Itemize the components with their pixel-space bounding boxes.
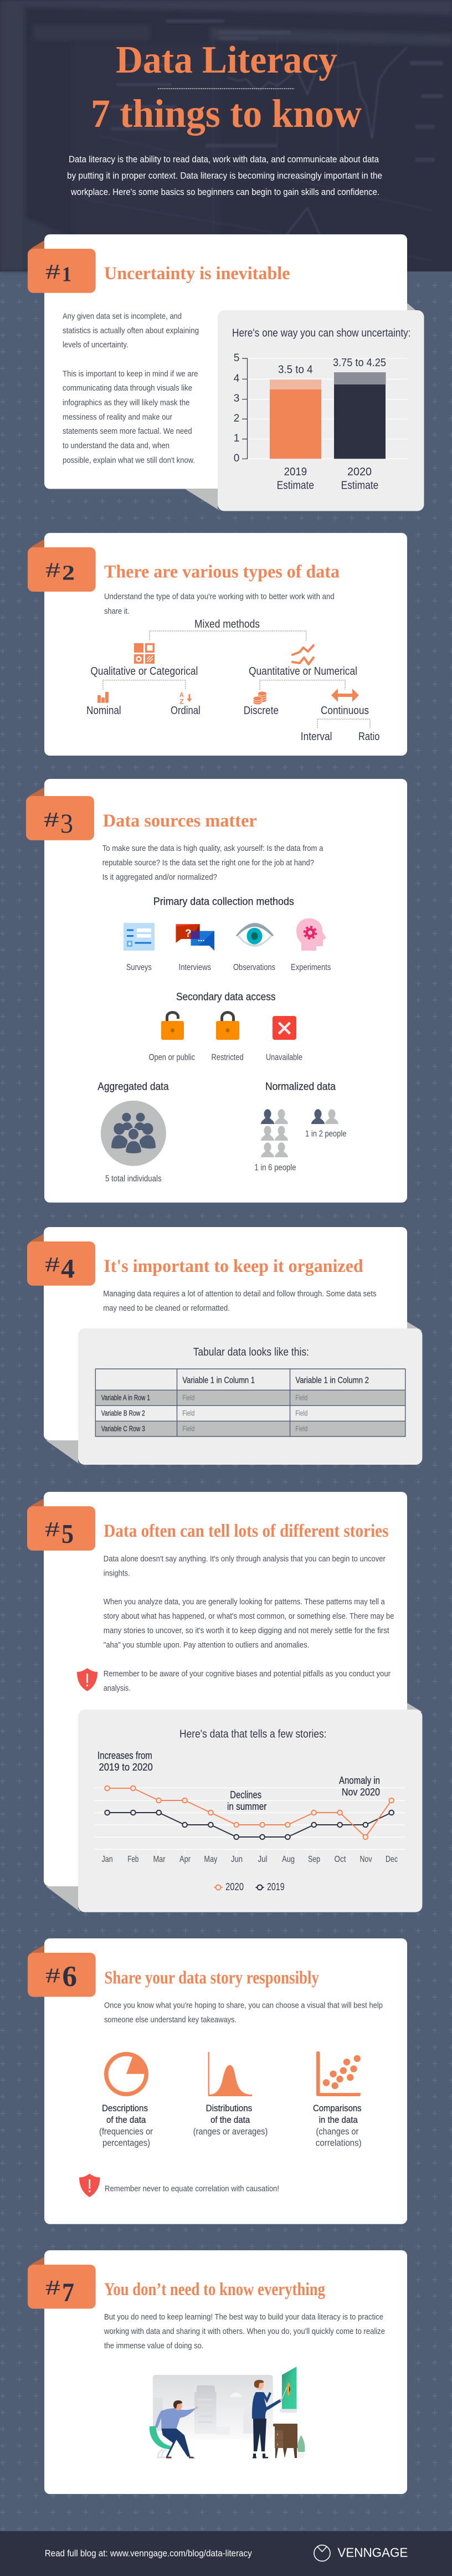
- icon: experiments head: [296, 918, 326, 951]
- table: Variable B Row 2: [101, 1409, 145, 1418]
- table: Field: [295, 1425, 307, 1433]
- labels: descriptions: of the data: [106, 2115, 146, 2125]
- callout: correlation warning: Remember never to equate correlation with causation!: [105, 2184, 279, 2193]
- table: Variable C Row 3: [101, 1425, 145, 1433]
- month axis labels: Jul: [258, 1855, 267, 1864]
- text: stories body: story about what has happened, or what's most common, or something else. There may be: [104, 1612, 394, 1621]
- text: uncertainty body: to understand the data and, when: [63, 441, 170, 450]
- heading 1: Uncertainty is inevitable: [104, 264, 290, 284]
- table: Field: [182, 1394, 194, 1402]
- labels: descriptions: (frequencies or: [99, 2126, 153, 2137]
- tree: mixed methods: Mixed methods: [194, 618, 260, 630]
- callout: cognitive biases: analysis.: [104, 1684, 131, 1693]
- hero background: blurred trading chart: [0, 0, 452, 271]
- panel: uncertainty chart: 5: [234, 352, 239, 364]
- title: Data Literacy: [116, 39, 337, 81]
- icon: group of people: [101, 1101, 166, 1166]
- heading: primary methods: Primary data collection methods: [153, 896, 294, 907]
- text: sources intro: Is it aggregated and/or normalized?: [102, 873, 217, 882]
- right person pointing: [252, 2380, 287, 2459]
- venngage logo: VENNGAGE: [337, 2546, 408, 2560]
- title: [91, 39, 362, 136]
- badge 6: [28, 1953, 96, 1997]
- heading 5: Data often can tell lots of different stories: [104, 1521, 389, 1541]
- table: Field: [295, 1409, 307, 1418]
- labels: qualitative and quantitative: Quantitative or Numerical: [249, 665, 357, 678]
- normalized data: 1 in 6 people: [254, 1163, 296, 1173]
- labels: secondary access: Open or public: [148, 1053, 195, 1063]
- badge 7: 7: [62, 2278, 74, 2307]
- text: keep learning body: the immense value of doing so.: [104, 2341, 203, 2351]
- month axis labels: Apr: [179, 1855, 191, 1864]
- text: keep learning body: But you do need to keep learning! The best way to build your data literacy is to practice: [104, 2312, 383, 2322]
- text: uncertainty body: statements seem more factual. We need: [63, 427, 192, 436]
- chart legend: [214, 1881, 285, 1892]
- text: stories body: "aha" you stumble upon. Pay attention to outliers and anomalies.: [104, 1640, 309, 1650]
- heading 6: Share your data story responsibly: [104, 1968, 319, 1988]
- labels: distributions: Distributions: [206, 2103, 252, 2113]
- badge 4: #: [45, 1253, 60, 1276]
- text: stories body: insights.: [104, 1568, 130, 1578]
- icon: ordinal A-Z: A: [179, 691, 184, 699]
- labels: secondary access: [148, 1053, 302, 1063]
- panel: uncertainty chart: 2: [234, 413, 239, 424]
- heading 7: You don’t need to know everything: [104, 2280, 325, 2300]
- icon: discrete coins: [253, 691, 267, 705]
- panel: section 7 keep learning: [28, 2250, 407, 2494]
- text: types intro: Understand the type of data you're working with to better work with and: [104, 592, 335, 602]
- icon: unavailable: [273, 1016, 296, 1040]
- panel: section 5 stories: [27, 1492, 422, 1912]
- text: uncertainty body: statistics is actually often about explaining: [63, 326, 199, 335]
- month axis labels: Dec: [386, 1855, 398, 1864]
- labels: data subtypes: [86, 705, 379, 743]
- callout: cognitive biases: Remember to be aware of your cognitive biases and potential pitfalls as you conduct your: [104, 1669, 391, 1679]
- labels: data subtypes: Ratio: [358, 731, 379, 743]
- labels: qualitative and quantitative: Qualitative or Categorical: [90, 665, 198, 678]
- badge 7: [28, 2265, 96, 2309]
- badge 2: [28, 547, 96, 592]
- panel: tabular data: [78, 1328, 422, 1465]
- labels: comparisons: in the data: [319, 2115, 358, 2125]
- chart annotations: 2019 to 2020: [99, 1762, 153, 1773]
- table: Variable 1 in Column 2: [295, 1376, 369, 1386]
- icon: quantitative zigzag: [292, 645, 314, 664]
- panel: line chart: Here's data that tells a few stories:: [179, 1728, 327, 1741]
- labels: data subtypes: Continuous: [321, 705, 369, 717]
- icon: observations eye: [236, 923, 274, 947]
- heading 2: There are various types of data: [104, 562, 340, 582]
- text: types intro: [104, 592, 335, 616]
- badge 7: #: [45, 2276, 60, 2300]
- text: uncertainty body: infographics as they will likely mask the: [63, 398, 189, 407]
- month axis labels: Nov: [360, 1855, 372, 1864]
- table: Field: [182, 1425, 194, 1433]
- text: stories body: many stories to uncover, so it's worth it to keep digging and not merely settle for the first: [104, 1626, 389, 1635]
- normalized data: 1 in 2 people: [305, 1130, 347, 1139]
- text: uncertainty body: communicating data through visuals like: [63, 383, 192, 393]
- text: uncertainty body: This is important to keep in mind if we are: [63, 369, 198, 378]
- month axis labels: Aug: [282, 1855, 295, 1864]
- text: uncertainty body: possible, explain what we still don't know.: [63, 455, 195, 465]
- footer: [0, 2531, 452, 2576]
- text: uncertainty body: [63, 311, 199, 465]
- labels: primary methods: Observations: [233, 963, 275, 972]
- aggregated data: 5 total individuals: [105, 1174, 162, 1184]
- text: share intro: Once you know what you're hoping to share, you can choose a visual that will best help: [104, 2000, 383, 2010]
- text: sources intro: To make sure the data is high quality, ask yourself: Is the data from a: [102, 844, 323, 853]
- left person on chair: [150, 2400, 198, 2459]
- chart legend: 2020: [225, 1881, 244, 1892]
- heading 3: Data sources matter: [103, 811, 257, 831]
- text: organized intro: may need to be cleaned or reformatted.: [103, 1304, 230, 1313]
- labels: qualitative and quantitative: [90, 665, 357, 678]
- panel: line chart: [78, 1710, 422, 1912]
- icon: distribution curve: [208, 2052, 252, 2096]
- text: uncertainty body: levels of uncertainty.: [63, 340, 129, 350]
- icon: scatter plot: [316, 2051, 361, 2096]
- labels: descriptions: [99, 2103, 153, 2148]
- panel: section 4 organized: [27, 1227, 422, 1465]
- labels: descriptions: percentages): [102, 2137, 150, 2148]
- intro text: by putting it in proper context. Data literacy is becoming increasingly important in the: [67, 171, 382, 181]
- icon: 1 in 2 people: [311, 1109, 338, 1124]
- text: organized intro: [103, 1289, 377, 1313]
- month axis labels: Jan: [102, 1855, 113, 1864]
- intro text: Data literacy is the ability to read data, work with data, and communicate about data: [69, 155, 379, 165]
- icon: interviews: ?: [185, 928, 192, 940]
- labels: data subtypes: Interval: [301, 731, 332, 743]
- icon: pie chart: [106, 2054, 146, 2094]
- normalized data: Normalized data: [265, 1081, 336, 1092]
- panel: uncertainty chart: Here's one way you can show uncertainty:: [232, 327, 411, 339]
- labels: distributions: [193, 2103, 268, 2137]
- text: sources intro: reputable source? Is the data set the right one for the job at hand?: [102, 858, 314, 868]
- badge 1: [28, 249, 96, 293]
- line series: 2019: [105, 1810, 394, 1839]
- screen and chart: [280, 2367, 297, 2413]
- panel: uncertainty chart: 2019: [284, 466, 307, 478]
- icon: 1 in 6 people: [261, 1109, 288, 1157]
- table: Variable A in Row 1: [101, 1394, 150, 1402]
- icon: interviews: [176, 924, 214, 951]
- normalized data: [254, 1081, 347, 1173]
- icon: open lock: [161, 1013, 184, 1040]
- line series: 2020: [105, 1786, 394, 1839]
- labels: data subtypes: Ordinal: [171, 705, 201, 717]
- badge 3: #: [44, 808, 59, 832]
- heading 4: It's important to keep it organized: [104, 1256, 363, 1276]
- badge 1: 1: [62, 263, 71, 286]
- text: keep learning body: working with data and sharing it with others. When you do, you'll quickly come to realize: [104, 2327, 385, 2336]
- intro text: workplace. Here's some basics so beginners can begin to gain skills and confidence.: [70, 187, 379, 197]
- icon: ordinal A-Z: Z: [179, 698, 184, 706]
- panel: uncertainty chart: 3.75 to 4.25: [333, 357, 386, 369]
- icon: restricted lock: [216, 1013, 239, 1040]
- text: organized intro: Managing data requires a lot of attention to detail and follow through. Some data sets: [103, 1289, 377, 1299]
- text: stories body: [104, 1554, 394, 1650]
- icon: nominal bars: [97, 692, 109, 703]
- badge 2: 2: [62, 562, 75, 585]
- text: uncertainty body: Any given data set is incomplete, and: [63, 311, 182, 321]
- panel: section 6 share responsibly: [28, 1938, 407, 2224]
- labels: primary methods: Interviews: [179, 963, 211, 972]
- panel: uncertainty chart: 1: [234, 433, 239, 444]
- text: stories body: When you analyze data, you are generally looking for patterns. These patterns may tell a: [104, 1597, 385, 1607]
- text: uncertainty body: messiness of reality and make our: [63, 412, 172, 422]
- icon: ordinal A-Z: [179, 691, 192, 706]
- chart annotations: Increases from: [97, 1750, 152, 1761]
- month axis labels: May: [204, 1855, 217, 1864]
- panel: section 3 data sources: [26, 779, 407, 1203]
- aggregated data: [97, 1081, 169, 1184]
- venngage logo: [314, 2545, 408, 2561]
- badge 6: 6: [62, 1961, 77, 1993]
- labels: comparisons: correlations): [316, 2137, 362, 2148]
- chart annotations: Declines: [230, 1789, 261, 1800]
- text: share intro: someone else understand key takeaways.: [104, 2015, 237, 2024]
- labels: secondary access: Unavailable: [266, 1053, 302, 1063]
- icon: warning shield: [79, 2174, 100, 2197]
- panel: uncertainty chart: 0: [234, 453, 239, 464]
- icon: continuous arrow: [331, 689, 359, 702]
- table: [95, 1369, 405, 1436]
- panel: section 2 types of data: [28, 533, 407, 756]
- heading: secondary access: Secondary data access: [176, 992, 276, 1003]
- footer link text: Read full blog at: www.venngage.com/blog/data-literacy: [45, 2548, 252, 2558]
- table: Field: [295, 1394, 307, 1402]
- text: stories body: Data alone doesn't say anything. It's only through analysis that you can begin to uncover: [104, 1554, 386, 1563]
- month axis labels: Oct: [335, 1855, 346, 1864]
- month axis labels: Feb: [127, 1855, 138, 1864]
- labels: primary methods: Surveys: [126, 963, 152, 972]
- labels: distributions: of the data: [210, 2115, 250, 2125]
- text: keep learning body: [104, 2312, 385, 2351]
- icon: qualitative squares: [134, 643, 155, 664]
- badge 4: 4: [61, 1253, 75, 1284]
- chart annotations: in summer: [227, 1801, 266, 1812]
- aggregated data: Aggregated data: [97, 1081, 169, 1092]
- chart annotations: Anomaly in: [339, 1775, 380, 1786]
- badge 5: 5: [61, 1518, 74, 1549]
- icon: interviews: ...: [198, 934, 205, 943]
- title: 7 things to know: [91, 91, 362, 136]
- chart legend: 2019: [267, 1881, 285, 1892]
- text: sources intro: [102, 844, 323, 882]
- month axis labels: Mar: [153, 1855, 166, 1864]
- intro text: [67, 155, 382, 197]
- labels: comparisons: [313, 2103, 362, 2148]
- month axis labels: [102, 1855, 398, 1864]
- panel: uncertainty chart: 4: [234, 373, 240, 384]
- tree: mixed methods: [150, 618, 306, 641]
- panel: section 1 uncertainty: [28, 234, 424, 511]
- labels: secondary access: Restricted: [211, 1053, 244, 1063]
- illustration: two people with data screen: [150, 2367, 305, 2459]
- bar: 2019 estimate: [270, 379, 321, 459]
- labels: data subtypes: Nominal: [86, 705, 121, 717]
- labels: primary methods: [126, 963, 331, 972]
- panel: uncertainty chart: 2020: [347, 466, 372, 478]
- labels: primary methods: Experiments: [291, 963, 331, 972]
- bar: 2020 estimate: [334, 372, 386, 459]
- table: Variable 1 in Column 1: [182, 1376, 255, 1386]
- labels: distributions: (ranges or averages): [193, 2126, 268, 2137]
- badge 4: [27, 1241, 95, 1286]
- icon: surveys: [124, 923, 155, 951]
- panel: tabular data: Tabular data looks like this:: [193, 1346, 309, 1358]
- badge 5: [27, 1506, 95, 1551]
- panel: uncertainty chart: 3.5 to 4: [278, 364, 312, 376]
- icon: warning shield: [77, 1668, 97, 1691]
- panel: uncertainty chart: [218, 310, 424, 511]
- cabinet and plant: [273, 2424, 305, 2458]
- labels: descriptions: Descriptions: [102, 2103, 148, 2113]
- month axis labels: Jun: [231, 1855, 243, 1864]
- text: share intro: [104, 2000, 383, 2024]
- chart annotations: Nov 2020: [342, 1787, 380, 1798]
- badge 3: 3: [60, 808, 73, 839]
- badge 1: #: [45, 260, 60, 284]
- panel: uncertainty chart: 3: [234, 393, 239, 404]
- panel: uncertainty chart: Estimate: [341, 480, 378, 492]
- badge 5: #: [45, 1518, 60, 1541]
- callout: cognitive biases: [104, 1669, 391, 1693]
- chart annotations: [97, 1750, 380, 1812]
- panel: uncertainty chart: Estimate: [277, 480, 314, 492]
- text: types intro: share it.: [104, 607, 130, 616]
- table: Field: [182, 1409, 194, 1418]
- labels: data subtypes: Discrete: [244, 705, 279, 717]
- badge 6: #: [45, 1964, 60, 1988]
- badge 3: [26, 796, 94, 840]
- labels: comparisons: Comparisons: [313, 2103, 362, 2113]
- badge 2: #: [45, 559, 60, 582]
- labels: comparisons: (changes or: [316, 2126, 359, 2137]
- month axis labels: Sep: [308, 1855, 320, 1864]
